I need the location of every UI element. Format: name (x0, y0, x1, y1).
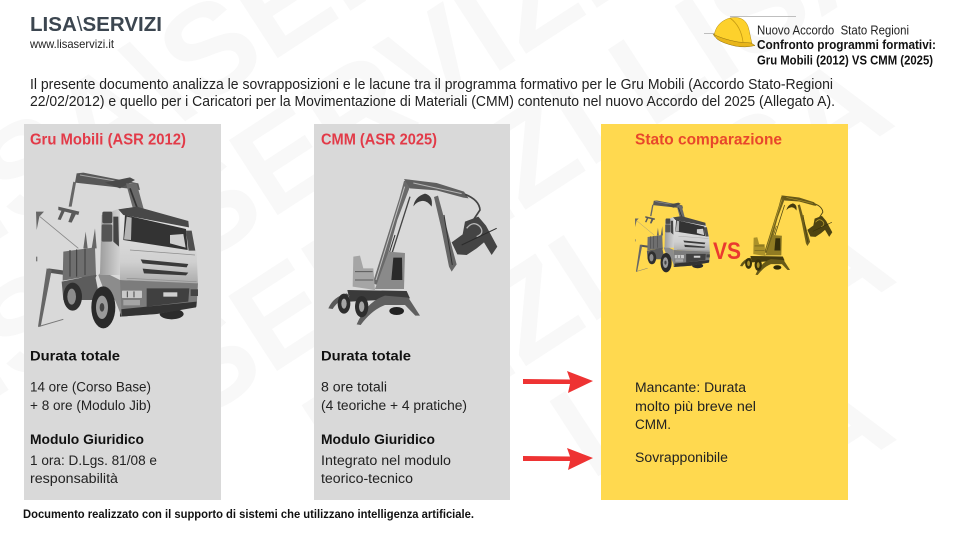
text: modulo giuridico (321, 431, 451, 486)
illustration: material handler (328, 179, 497, 325)
text: durata: (4 teoriche + 4 pratiche) (321, 398, 467, 413)
illustration: truck crane (36, 173, 198, 328)
logo: LISA\SERVIZI (30, 13, 162, 36)
text: mancante (635, 380, 756, 432)
text: modulo giuridico: responsabilità (30, 471, 119, 486)
text: durata: 8 ore totali (321, 380, 387, 394)
text: modulo giuridico: teorico-tecnico (321, 471, 413, 486)
heading: Gru Mobili: Gru Mobili (ASR 2012) (30, 132, 186, 148)
panel: Stato comparazione (601, 124, 848, 500)
text: modulo giuridico: Modulo Giuridico (30, 431, 144, 447)
text: modulo giuridico: Modulo Giuridico (321, 431, 435, 447)
text: durata: Durata totale (321, 348, 411, 364)
text: modulo giuridico (30, 431, 157, 486)
background: watermark: RVIZI LISA (279, 25, 914, 508)
header: document title (757, 24, 936, 68)
text: sovrapponibile: Sovrapponibile (635, 450, 728, 465)
header: document title: Confronto programmi formativi: (757, 38, 936, 52)
background: watermark: I LISA (527, 181, 915, 504)
icon: yellow safety helmet (704, 16, 796, 47)
background: watermark: A\ (24, 324, 212, 517)
text: mancante: Mancante: Durata (635, 380, 747, 395)
text: modulo giuridico: 1 ora: D.Lgs. 81/08 e (30, 453, 157, 468)
text: mancante: CMM. (635, 417, 671, 432)
heading: Stato comparazione: Stato comparazione (635, 132, 782, 148)
text: durata (321, 348, 467, 413)
intro paragraph: 22/02/2012) e quello per i Caricatori per la Movimentazione di Materiali (CMM) contenuto nel nuovo Accordo del 2025 (Allegato A). (30, 94, 835, 110)
arrow: modulo giuridico to sovrapponibile (523, 448, 593, 470)
panel: CMM (314, 124, 510, 500)
header: document title: Gru Mobili (2012) VS CMM (2025) (757, 54, 933, 68)
label: VS: VS (713, 238, 741, 265)
text: durata: 14 ore (Corso Base) (30, 380, 151, 394)
footer note: Documento realizzato con il supporto di sistemi che utilizzano intelligenza artificiale. (23, 509, 474, 521)
arrow: durata to mancante (523, 371, 593, 393)
intro paragraph: Il presente documento analizza le sovrapposizioni e le lacune tra il programma formativo per le Gru Mobili (Accordo Stato-Regioni (30, 77, 833, 93)
heading: CMM: CMM (ASR 2025) (321, 132, 437, 148)
text: durata (30, 348, 151, 413)
logo (29, 13, 162, 51)
header: document title: Nuovo Accordo Stato Regioni (757, 24, 909, 38)
panel: Gru Mobili (24, 124, 221, 500)
website: www.lisaservizi.it (29, 37, 115, 51)
background: watermark: A (757, 339, 915, 512)
text: modulo giuridico: Integrato nel modulo (321, 453, 451, 468)
illustration: small truck crane (635, 200, 710, 272)
intro paragraph (30, 77, 835, 110)
text: mancante: molto più breve nel (635, 399, 756, 414)
illustration: small yellow material handler (740, 195, 832, 275)
text: durata: + 8 ore (Modulo Jib) (30, 398, 151, 413)
text: durata: Durata totale (30, 348, 120, 364)
